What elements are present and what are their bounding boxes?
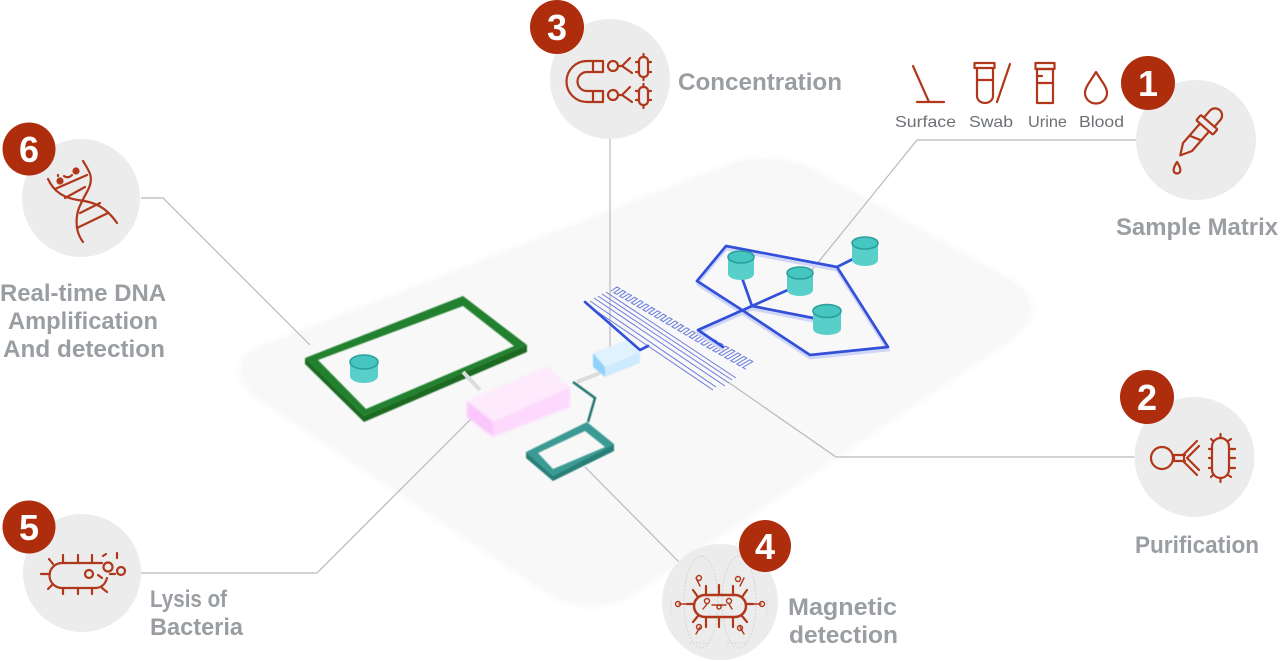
icon: surface [913, 66, 944, 102]
step 1: sample matrix: 1 [1138, 63, 1158, 104]
sample type labels: Blood [1079, 114, 1124, 131]
icon: magnetic field lines [671, 556, 767, 648]
step 6: real-time DNA amplification: 6 [19, 129, 39, 170]
step 3: concentration: 3 [547, 7, 567, 48]
step 6: real-time DNA amplification [0, 122, 166, 363]
step 1: sample matrix: Sample Matrix [1116, 214, 1279, 241]
microfluidic chip board [242, 159, 1029, 604]
step 4: magnetic detection: 4 [755, 526, 775, 567]
icon: blood drop [1085, 72, 1107, 104]
step 6: real-time DNA amplification: Real-time DNA [0, 280, 166, 307]
step 4: magnetic detection: Magnetic [788, 594, 897, 621]
step 6: real-time DNA amplification: Amplification [8, 308, 158, 335]
step 5: lysis of bacteria: 5 [19, 507, 39, 548]
step 2: purification [1120, 370, 1259, 559]
step 3: concentration [530, 0, 842, 139]
icon: magnet with antibodies and bacteria [566, 54, 651, 108]
teal magnetic detection loop [526, 382, 614, 481]
step 4: magnetic detection [662, 520, 898, 660]
step 2: purification: Purification [1135, 532, 1259, 559]
blue sample network [697, 246, 888, 358]
purification serpentine channels [585, 287, 753, 390]
step 5: lysis of bacteria [2, 500, 244, 641]
step 1: sample matrix [1116, 56, 1279, 241]
icon: urine container [1036, 63, 1054, 103]
leader lines [141, 139, 1137, 573]
step 5: lysis of bacteria: Bacteria [150, 614, 244, 641]
step 5: lysis of bacteria: Lysis of [150, 586, 228, 613]
sample reservoirs [728, 237, 878, 335]
step 6: real-time DNA amplification: And detection [3, 336, 165, 363]
pink lysis chamber [467, 366, 570, 437]
icon: swab tube [974, 63, 1010, 103]
green amplification loop [305, 296, 527, 422]
sample type labels [895, 114, 1124, 131]
icon: bacterium with antibodies [676, 576, 764, 634]
sample type labels: Urine [1028, 114, 1067, 131]
icon: dropper [1172, 103, 1228, 174]
icon: antibody and bacterium [1151, 434, 1235, 482]
sample type labels: Surface [895, 114, 956, 131]
icon: lysing bacterium [41, 553, 125, 594]
sample type labels: Swab [969, 114, 1013, 131]
sample types row [895, 63, 1124, 131]
connector channels between chambers [463, 372, 600, 390]
icon: DNA helix [48, 161, 117, 242]
step 2: purification: 2 [1137, 377, 1157, 418]
step 4: magnetic detection: detection [789, 622, 898, 649]
green chamber reservoir [350, 355, 378, 383]
blue concentration chamber [593, 340, 640, 377]
step 3: concentration: Concentration [678, 69, 842, 96]
